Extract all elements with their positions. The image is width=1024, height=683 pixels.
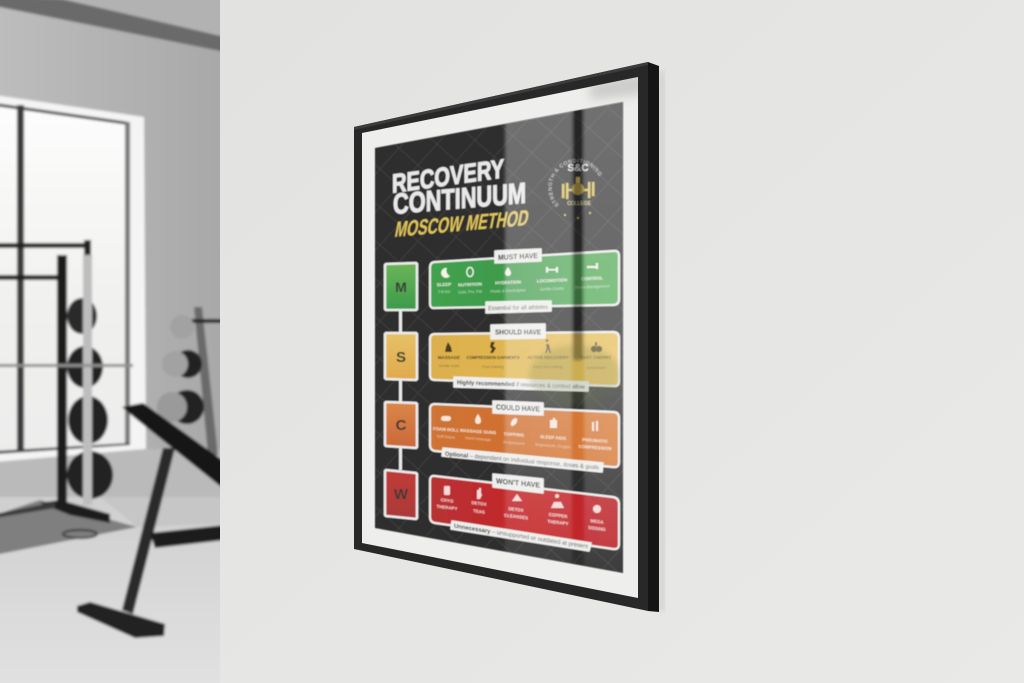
won't have badge xyxy=(493,474,543,493)
should have items: ACTIVE RECOVERY xyxy=(527,355,569,360)
won't have items: THERAPY xyxy=(437,504,458,511)
must have items: HYDRATION xyxy=(495,279,521,286)
should have badge xyxy=(491,324,545,339)
logo initials: S&C xyxy=(567,163,589,174)
window reveal xyxy=(0,95,146,462)
won't have items: TEAS xyxy=(473,508,485,515)
title: CONTINUUM xyxy=(393,178,526,221)
must have items xyxy=(437,263,610,294)
box: W xyxy=(385,470,417,519)
title xyxy=(392,153,526,221)
won't have note: Unnecessary – unsupported or outdated at present xyxy=(454,524,588,550)
back wall xyxy=(0,0,225,505)
window frame xyxy=(0,103,130,454)
box: M xyxy=(385,263,417,310)
won't have items: CRYO xyxy=(441,497,454,504)
logo xyxy=(548,158,602,220)
could have items: SLEEP AIDS xyxy=(540,434,566,441)
could have items: COMPRESSION xyxy=(579,444,611,451)
won't have items: COPPER xyxy=(549,512,568,519)
logo dumbbell xyxy=(562,177,594,199)
should have note: Highly recommended if resources & context allow xyxy=(457,380,586,391)
won't have items: DETOX xyxy=(508,506,524,513)
box: C xyxy=(385,402,417,448)
won't have items: THERAPY xyxy=(548,519,569,526)
could have items: FOAM ROLL xyxy=(433,426,459,433)
ceiling xyxy=(60,0,225,38)
won't have items: CLEANSES xyxy=(504,513,528,520)
should have items: COMPRESSION GARMENTS xyxy=(466,355,520,360)
panel: must have xyxy=(430,249,619,313)
framed poster xyxy=(354,62,666,612)
box: W: W xyxy=(394,486,409,503)
could have items: Soft tissue xyxy=(437,433,455,440)
lower wall xyxy=(0,449,225,515)
ceiling beam xyxy=(0,0,225,52)
should have items: MASSAGE xyxy=(438,355,460,360)
could have items: CUPPING xyxy=(504,431,525,438)
could have items: MASSAGE GUNS xyxy=(460,428,496,435)
rubber mat xyxy=(0,500,137,555)
must have items: Fluids & Electrolytes xyxy=(490,287,526,294)
should have items xyxy=(438,339,612,370)
must have items: Gentle Cardio xyxy=(540,286,564,291)
must have items: 7-9 hrs xyxy=(438,289,450,294)
box: C: C xyxy=(396,417,407,434)
could have note: Optional – dependent on individual response, doses & goals xyxy=(445,452,599,471)
could have items: Acupressure xyxy=(503,439,525,446)
poster xyxy=(374,101,624,574)
box: S xyxy=(385,333,417,380)
must have items: Stress Management xyxy=(575,283,610,290)
won't have badge: WON'T HAVE xyxy=(496,476,540,490)
should have items: TART CHERRY xyxy=(581,355,612,360)
should have items: Antioxidant xyxy=(586,365,607,370)
frame shadow xyxy=(660,70,664,612)
won't have items xyxy=(437,486,606,532)
should have items: Post training xyxy=(482,364,504,369)
won't have items: DETOX xyxy=(471,500,487,507)
must have items: SLEEP xyxy=(437,282,451,287)
window glass xyxy=(0,103,129,453)
must have items: CONTROL xyxy=(581,276,603,281)
panel: could have xyxy=(430,401,619,472)
green band xyxy=(430,251,619,308)
subtitle: MOSCOW METHOD xyxy=(393,205,531,242)
power rack xyxy=(0,240,133,523)
should have items: Easy low loading xyxy=(533,364,563,369)
gym background scene xyxy=(0,0,225,683)
logo dots xyxy=(564,212,591,219)
logo ring text: STRENGTH & CONDITIONING xyxy=(548,158,602,208)
could have badge: COULD HAVE xyxy=(496,402,540,414)
white mat xyxy=(362,77,638,598)
should have items: Gentle work xyxy=(439,363,459,368)
essential note: Essential for all athletes xyxy=(488,305,548,312)
essential note xyxy=(486,301,551,313)
logo caption: COLLEGE xyxy=(567,201,591,207)
box: M: M xyxy=(395,279,407,295)
red band xyxy=(430,476,619,549)
could have items: Magnesium, Oxygen xyxy=(535,442,571,449)
diamond pattern xyxy=(375,102,623,573)
could have items xyxy=(433,414,611,451)
title: RECOVERY xyxy=(392,153,504,199)
glass reflection xyxy=(503,102,623,572)
must have items: Cals, Pro, Fat xyxy=(458,288,483,294)
dumbbell rack xyxy=(157,307,222,455)
orange band xyxy=(430,404,619,467)
could have items: PNEUMATIC xyxy=(582,437,609,444)
box: S: S xyxy=(396,349,406,366)
resistance band on mat xyxy=(63,530,97,538)
black frame xyxy=(354,62,648,611)
panel: should have xyxy=(430,324,619,391)
must have items: NUTRITION xyxy=(458,282,482,287)
must have items: LOCOMOTION xyxy=(537,277,567,284)
weight bench xyxy=(77,403,225,638)
should have badge: SHOULD HAVE xyxy=(495,328,541,336)
mat reflection xyxy=(586,77,638,102)
won't have items: MEGA xyxy=(590,518,604,525)
gallery wall xyxy=(220,0,1024,683)
could have items: Hand massage xyxy=(465,435,491,442)
panel: won't have xyxy=(430,474,619,551)
floor xyxy=(0,497,225,683)
must have badge: MUST HAVE xyxy=(498,251,538,262)
yellow band xyxy=(430,332,619,386)
poster background xyxy=(375,102,623,573)
won't have items: DOSING xyxy=(588,525,606,532)
connector line xyxy=(399,310,402,470)
